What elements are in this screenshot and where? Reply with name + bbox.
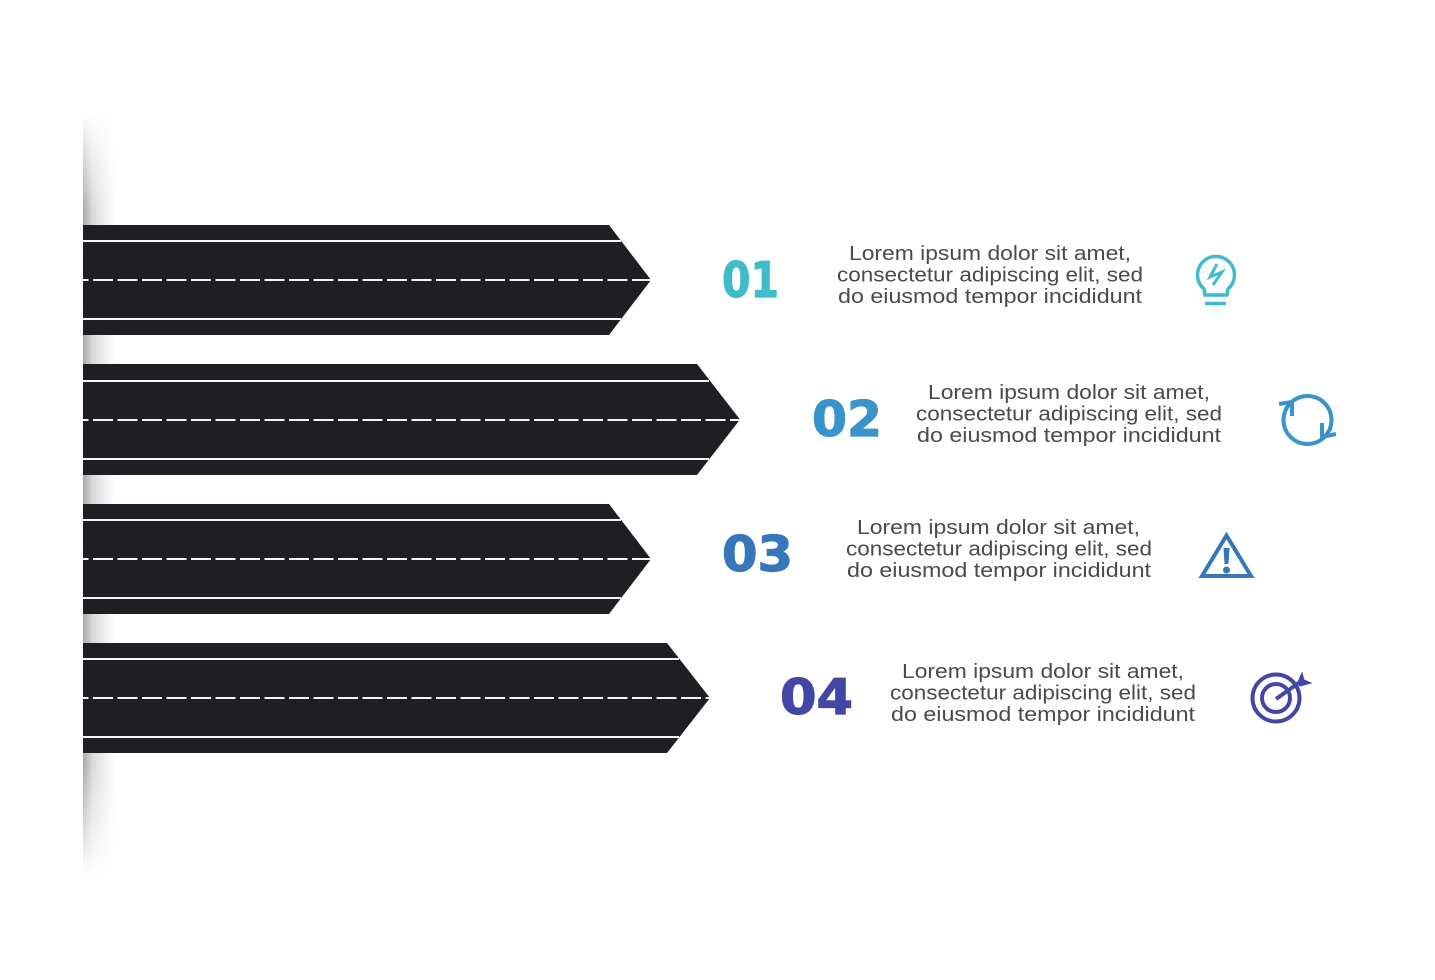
text block 1 xyxy=(837,242,1143,308)
icon: target with arrow xyxy=(1252,673,1311,722)
wall shadow xyxy=(83,112,115,877)
icon: refresh cycle xyxy=(1279,396,1336,444)
text block 3: do eiusmod tempor incididunt xyxy=(847,559,1151,582)
text block 4: Lorem ipsum dolor sit amet, xyxy=(902,660,1184,683)
text block 1: Lorem ipsum dolor sit amet, xyxy=(849,242,1131,265)
number 02: 02 xyxy=(812,391,882,448)
text block 2: do eiusmod tempor incididunt xyxy=(917,424,1221,447)
text block 2 xyxy=(916,381,1222,447)
text block 4: do eiusmod tempor incididunt xyxy=(891,703,1195,726)
number 03: 03 xyxy=(722,526,793,583)
text block 1: do eiusmod tempor incididunt xyxy=(838,285,1142,308)
number 04: 04 xyxy=(780,669,853,726)
text block 1: consectetur adipiscing elit, sed xyxy=(837,264,1143,286)
text block 2: consectetur adipiscing elit, sed xyxy=(916,402,1222,426)
text block 3: Lorem ipsum dolor sit amet, xyxy=(857,516,1140,539)
road 4 xyxy=(83,643,710,753)
road 2 xyxy=(83,364,740,475)
icon: warning triangle xyxy=(1202,536,1251,576)
number 01: 01 xyxy=(722,252,779,309)
road 3 xyxy=(83,504,651,614)
icon: light bulb with bolt xyxy=(1198,256,1235,304)
road 1 xyxy=(83,225,651,335)
text block 4 xyxy=(890,660,1196,726)
text block 2: Lorem ipsum dolor sit amet, xyxy=(928,381,1210,404)
text block 4: consectetur adipiscing elit, sed xyxy=(890,682,1196,704)
text block 3: consectetur adipiscing elit, sed xyxy=(846,538,1152,560)
text block 3 xyxy=(846,516,1152,582)
